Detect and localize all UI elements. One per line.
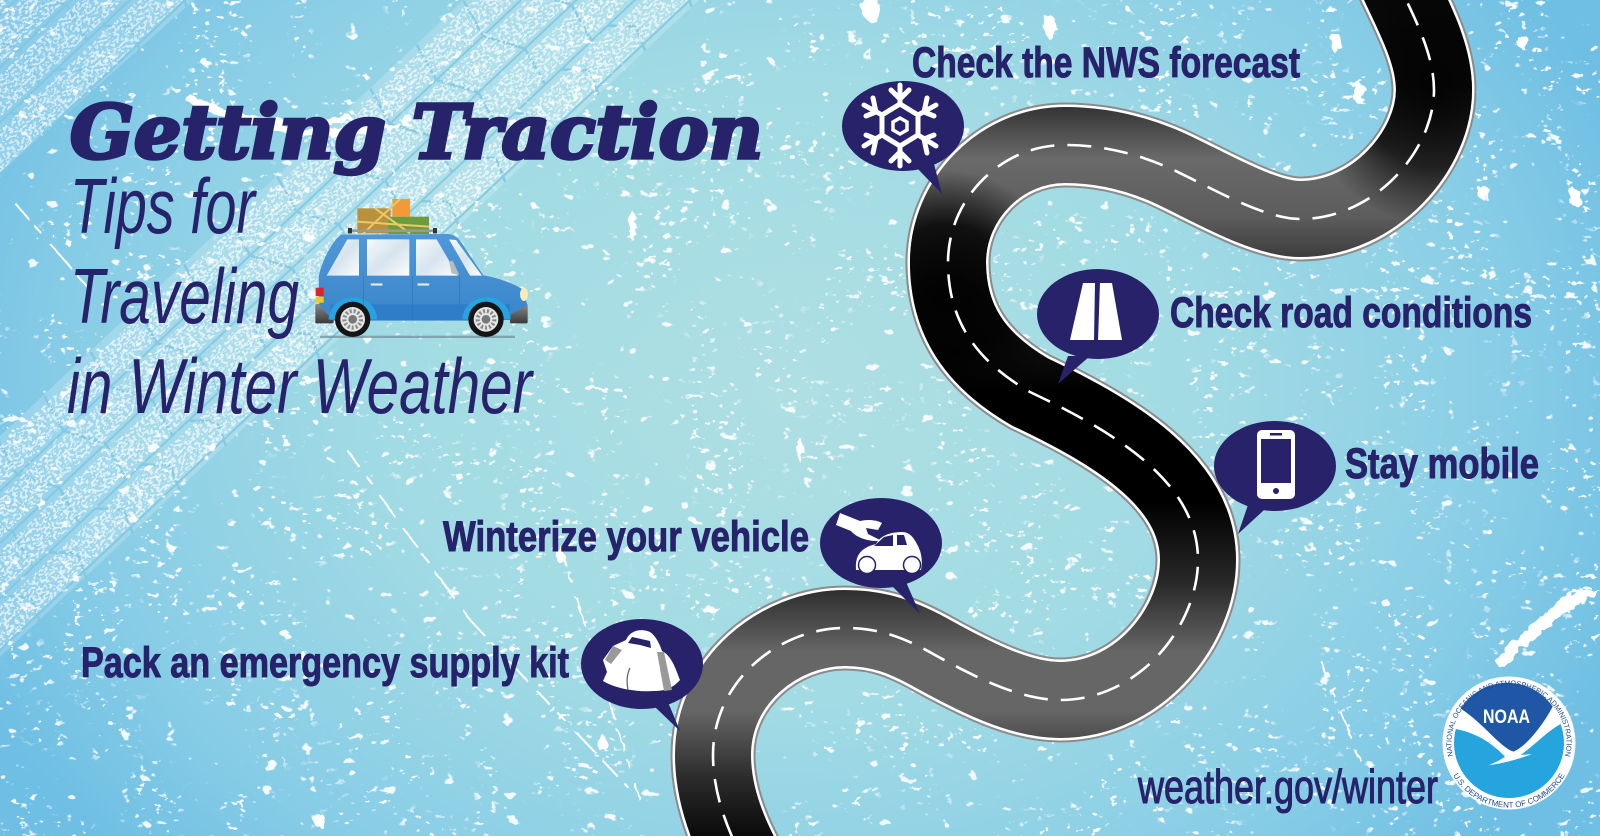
subtitle — [67, 162, 534, 430]
callout: check forecast — [842, 39, 1300, 194]
label: Stay mobile — [1345, 440, 1539, 488]
callout: stay mobile — [1214, 421, 1539, 534]
icon: small car — [856, 532, 922, 574]
car body — [319, 234, 527, 321]
logo ring text: U.S. DEPARTMENT OF COMMERCE — [1454, 772, 1565, 808]
roof luggage — [348, 199, 437, 234]
bumpers — [315, 304, 528, 323]
tail lights and headlight — [316, 288, 528, 303]
title: Getting Traction — [70, 90, 763, 176]
road — [713, 0, 1434, 836]
wheel arches — [329, 297, 511, 319]
tire track: top-left — [0, 0, 296, 178]
windows — [327, 239, 482, 276]
label: Pack an emergency supply kit — [81, 639, 569, 687]
subtitle: in Winter Weather — [67, 342, 534, 430]
callout: road conditions — [1037, 269, 1532, 384]
NOAA logo — [1442, 676, 1576, 810]
logo wordmark: NOAA — [1483, 707, 1530, 728]
subtitle: Traveling — [70, 252, 299, 340]
logo ring text — [1446, 680, 1572, 808]
car shadow — [320, 336, 515, 338]
callout: emergency kit — [81, 619, 703, 731]
wheels — [335, 302, 504, 337]
callout bubble — [820, 498, 942, 614]
icon: wrench — [836, 513, 882, 541]
icon: duffel bag — [603, 630, 680, 691]
icon: snowflake — [864, 85, 936, 166]
callout bubble — [842, 81, 964, 194]
label: Check the NWS forecast — [912, 39, 1300, 87]
callout bubble — [1214, 421, 1336, 534]
callout: winterize vehicle — [443, 498, 942, 614]
door handles and mirror — [371, 261, 459, 286]
logo wings — [1452, 683, 1562, 765]
subtitle: Tips for — [70, 162, 257, 250]
icon: phone — [1257, 430, 1295, 499]
road centre dashed line — [713, 0, 1434, 836]
callout bubble — [581, 619, 703, 731]
callout bubble — [1037, 269, 1159, 384]
car illustration — [315, 199, 528, 338]
tire track: diagonal band — [0, 0, 699, 658]
icon: road — [1070, 283, 1122, 340]
label: Winterize your vehicle — [443, 513, 809, 561]
website url: weather.gov/winter — [1137, 760, 1438, 813]
logo ring text: NATIONAL OCEANIC AND ATMOSPHERIC ADMINISTRATION — [1446, 680, 1572, 756]
